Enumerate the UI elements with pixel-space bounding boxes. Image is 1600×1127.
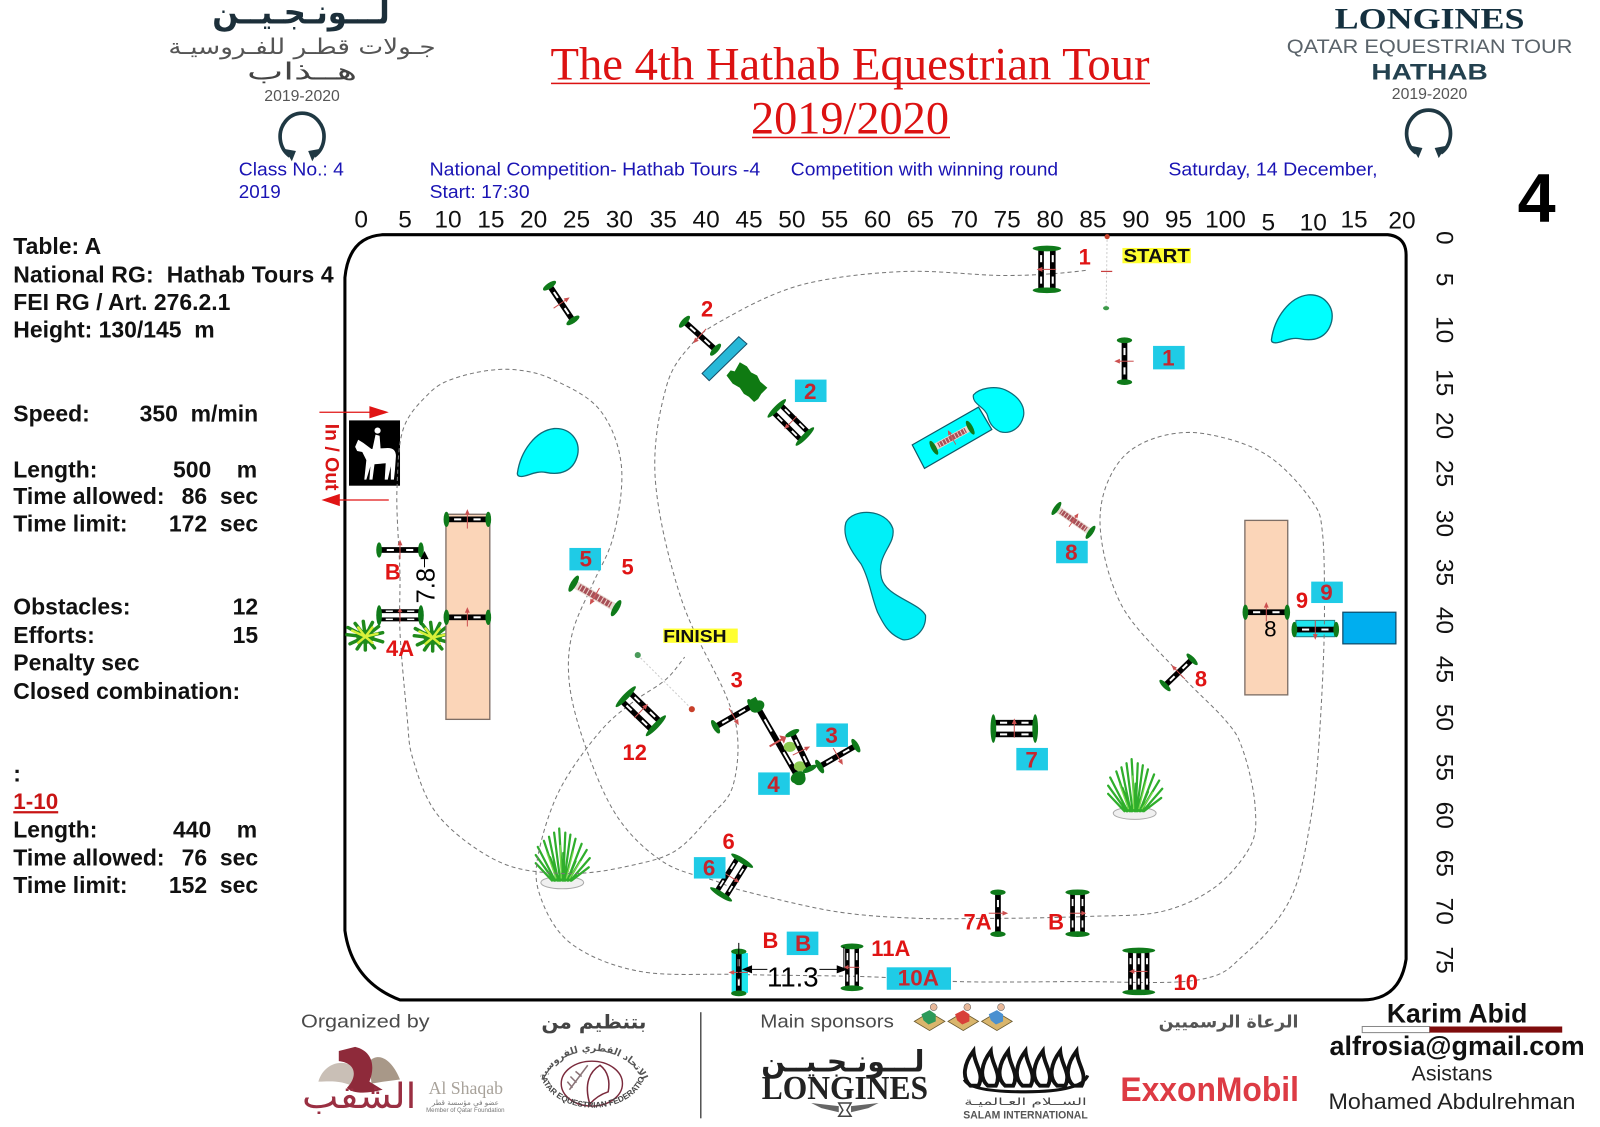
table and rules: Height: 130/145 m — [13, 317, 215, 343]
jump 2 oxer — [766, 397, 816, 447]
top metre axis: 50 — [778, 207, 805, 234]
red jump numbers: 11A — [871, 936, 910, 961]
jump 1 vertical — [1114, 337, 1134, 385]
start label: START — [1123, 245, 1191, 266]
title — [551, 39, 1150, 145]
top metre axis: 0 — [354, 207, 368, 234]
red jump numbers: 6 — [722, 829, 735, 854]
right metre axis: 35 — [1431, 559, 1458, 586]
Qatar Equestrian Federation logo — [540, 1044, 648, 1108]
long rail 4 — [746, 697, 810, 787]
right metre axis: 75 — [1431, 947, 1458, 974]
plant right of 4A — [414, 622, 450, 651]
Al Shaqab wordmark: Al Shaqab — [429, 1078, 503, 1098]
season: 2019-2020 — [264, 88, 340, 105]
obstacles: Penalty sec — [13, 649, 140, 675]
grass lower right — [1108, 759, 1162, 819]
right metre axis: 60 — [1431, 802, 1458, 829]
pond upper centre — [973, 388, 1024, 432]
red jump numbers: 9 — [1296, 588, 1308, 613]
Salam International logo: SALAM INTERNATIONAL — [963, 1109, 1088, 1121]
Longines logo — [761, 1044, 928, 1116]
pond top right — [1271, 295, 1332, 343]
start line — [1101, 234, 1112, 310]
arabic official sponsors: الرعاة الرسميين — [1159, 1013, 1298, 1033]
distance 11.3: 11.3 — [767, 962, 819, 993]
first round times: 172 sec — [169, 511, 258, 537]
Longines logo: LONGINES — [762, 1070, 928, 1107]
right metre axis: 40 — [1431, 607, 1458, 634]
right metre axis: 10 — [1431, 316, 1458, 343]
box 8 — [1056, 540, 1088, 565]
course route — [397, 270, 1324, 983]
obstacles: 15 — [233, 622, 258, 648]
jump 1 — [1033, 246, 1061, 293]
left tour logo (Arabic) — [168, 0, 436, 161]
finish label: FINISH — [663, 626, 727, 646]
plant left of 4A — [347, 621, 383, 650]
red jump numbers: 7A — [964, 910, 992, 935]
jump 3 — [708, 696, 759, 737]
box 4: 4 — [767, 772, 780, 797]
right metre axis: 0 — [1431, 231, 1458, 245]
grass lower left — [536, 829, 590, 889]
box 6 — [694, 855, 726, 880]
season: 2019-2020 — [1392, 86, 1468, 103]
jump 2 — [676, 313, 724, 359]
second round heading: 1-10 — [13, 789, 58, 814]
box 9: 9 — [1320, 580, 1333, 605]
jump 7 — [991, 714, 1038, 743]
red jump numbers: 5 — [621, 554, 634, 579]
top metre axis: 45 — [735, 207, 763, 234]
top metre axis: 15 — [1340, 207, 1368, 234]
jump B right — [1065, 889, 1090, 937]
obstacles: Obstacles: — [13, 593, 131, 619]
footer: organizers — [301, 1011, 648, 1117]
title line 1: The 4th Hathab Equestrian Tour — [551, 39, 1150, 91]
top metre axis: 35 — [650, 207, 677, 234]
right metre axis: 50 — [1431, 704, 1458, 731]
second round times: Time limit: — [13, 872, 128, 898]
sponsor figures icon — [914, 1004, 1012, 1031]
Al Shaqab wordmark: عضو في مؤسسة قطر — [431, 1098, 499, 1107]
right metre axis: 70 — [1431, 898, 1458, 925]
box 5 — [569, 546, 601, 571]
second round times: 440 m — [173, 817, 257, 843]
designer credits — [1329, 998, 1585, 1114]
red jump numbers: 10 — [1174, 970, 1198, 995]
box 6: 6 — [703, 855, 715, 880]
box B: B — [795, 931, 811, 956]
Al Shaqab logo: الشقب — [302, 1077, 416, 1117]
red jump numbers: 3 — [731, 668, 743, 693]
top metre axis: 95 — [1165, 207, 1192, 234]
top metre axis: 80 — [1036, 207, 1064, 234]
box 1: 1 — [1162, 345, 1175, 370]
water tray under jump — [912, 407, 992, 468]
Al Shaqab wordmark — [426, 1078, 505, 1114]
second round times: Time allowed: — [13, 844, 165, 870]
jump 4A — [376, 605, 424, 625]
jump on left sand mid — [444, 607, 491, 627]
jump 11A — [841, 944, 863, 991]
top metre axis: 10 — [434, 207, 462, 234]
table and rules: National RG: Hathab Tours 4 — [13, 262, 334, 288]
jump over water tray — [927, 419, 976, 456]
top metre axis: 5 — [1262, 210, 1275, 237]
red jump numbers: B — [762, 928, 778, 953]
start time: Start: 17:30 — [430, 181, 530, 202]
first round times: 500 m — [173, 457, 257, 483]
arabic venue: هــذاب — [247, 58, 357, 86]
competition type: Competition with winning round — [791, 159, 1058, 180]
jump 3 second — [813, 736, 863, 777]
email: alfrosia@gmail.com — [1330, 1031, 1585, 1061]
jump 5 — [566, 574, 623, 619]
small water tray — [1296, 620, 1335, 637]
top metre axis: 25 — [563, 207, 590, 234]
box 10A — [887, 966, 951, 991]
arabic organized by: بتنظيم من — [541, 1011, 646, 1034]
ExxonMobil logo: ExxonMobil — [1120, 1071, 1299, 1109]
distance 8: 8 — [1264, 617, 1277, 642]
speed: Speed: — [13, 400, 90, 426]
jump 8 pink — [1050, 500, 1098, 540]
box 5: 5 — [579, 546, 592, 571]
pond central — [845, 512, 926, 640]
title underline 2 — [752, 137, 950, 138]
table and rules: Table: A — [13, 233, 101, 259]
second round times: 152 sec — [169, 872, 258, 898]
horse and rider sign — [349, 420, 400, 486]
name bar — [1362, 1026, 1562, 1033]
venue: HATHAB — [1371, 60, 1488, 85]
top metre axis: 60 — [864, 207, 891, 234]
footer divider — [700, 1012, 702, 1118]
jump 12 — [614, 684, 668, 738]
box 3 — [816, 723, 848, 748]
speed — [13, 400, 258, 426]
plants — [347, 621, 1162, 889]
top metre axis: 70 — [951, 207, 978, 234]
jump 6 — [709, 852, 755, 903]
first round times — [13, 457, 258, 537]
box B — [787, 931, 818, 956]
pond left — [517, 429, 578, 477]
brand: LONGINES — [1335, 4, 1524, 36]
top metre axis: 5 — [398, 207, 412, 234]
speed: 350 m/min — [140, 400, 258, 426]
left specification panel — [13, 233, 334, 898]
top metre axis: 10 — [1300, 210, 1327, 237]
jump 9 — [1292, 620, 1339, 640]
arena outline — [345, 235, 1406, 1000]
arabic tour name: جـولات قطـر للفـروسيـة — [168, 35, 436, 60]
exit arrow — [321, 494, 389, 506]
first round times: 86 sec — [182, 483, 258, 509]
jump on left sand top — [444, 509, 491, 529]
jump on right sand — [1243, 602, 1290, 621]
red jump numbers: 4A — [386, 636, 414, 661]
Longines logo: لـــونـجـيــن — [761, 1044, 924, 1078]
blue plank — [702, 337, 747, 381]
distance 7.8: 7.8 — [413, 568, 441, 603]
second round times: Length: — [13, 817, 97, 843]
top metre axis: 55 — [821, 207, 848, 234]
table and rules — [13, 233, 334, 343]
designer name: Karim Abid — [1387, 998, 1527, 1028]
first round times: Length: — [13, 457, 97, 483]
red jump numbers: 1 — [1079, 244, 1091, 269]
right metre axis: 30 — [1431, 510, 1458, 537]
class number: 4 — [1518, 160, 1556, 236]
box 2 — [795, 379, 827, 404]
box 9 — [1311, 580, 1343, 605]
box 8: 8 — [1065, 540, 1078, 565]
box 4 — [758, 772, 790, 797]
top metre axis: 85 — [1079, 207, 1106, 234]
right metre axis: 25 — [1431, 460, 1458, 487]
box 10A: 10A — [898, 966, 939, 991]
Qatar Equestrian Federation logo: الاتحاد القطري للفروسية — [540, 1044, 648, 1080]
second round times: 76 sec — [182, 844, 258, 870]
distance 7.8 — [413, 551, 441, 603]
water ponds — [517, 295, 1396, 644]
finish line — [635, 652, 695, 712]
first round times: Time allowed: — [13, 483, 165, 509]
competition info — [239, 159, 1378, 202]
entry arrow — [319, 406, 389, 418]
assistant name: Mohamed Abdulrehman — [1329, 1089, 1575, 1114]
assistant heading: Asistans — [1412, 1062, 1492, 1086]
distance 11.3 — [739, 943, 848, 993]
jump 10 — [1122, 948, 1155, 995]
first round times: Time limit: — [13, 511, 128, 537]
top metre axis: 65 — [907, 207, 934, 234]
sand box right — [1245, 520, 1288, 695]
box 2: 2 — [804, 379, 816, 404]
obstacles: 12 — [233, 593, 258, 619]
blue rectangle — [1343, 612, 1396, 644]
red jump numbers: 12 — [623, 740, 647, 765]
date: Saturday, 14 December, — [1168, 159, 1378, 180]
red jump numbers: B — [385, 560, 401, 585]
red jump numbers: 2 — [701, 296, 713, 321]
second round heading: : — [13, 761, 21, 787]
right metre axis: 5 — [1431, 273, 1458, 286]
in/out label: In / Out — [321, 424, 343, 491]
red jump numbers: B — [1048, 910, 1064, 935]
ring symbol — [280, 113, 324, 161]
title underline 1 — [551, 83, 1150, 84]
Al Shaqab wordmark: Member of Qatar Foundation — [426, 1107, 505, 1114]
top metre axis: 40 — [693, 207, 720, 234]
top metre axis: 20 — [520, 207, 547, 234]
Al Shaqab logo — [302, 1047, 416, 1117]
right metre axis: 45 — [1431, 656, 1458, 683]
class number line: Class No.: 4 — [239, 159, 344, 180]
jump top left — [540, 278, 583, 328]
title line 2: 2019/2020 — [751, 93, 949, 145]
jump 8 — [1156, 650, 1200, 694]
top metre axis: 30 — [606, 207, 633, 234]
table and rules: FEI RG / Art. 276.2.1 — [13, 289, 231, 315]
right metre axis: 55 — [1431, 754, 1458, 781]
inner rail with shrubs — [783, 726, 820, 775]
red jump numbers: 8 — [1195, 667, 1207, 692]
Qatar Equestrian Federation logo: QATAR EQUESTRIAN FEDERATION — [541, 1076, 644, 1108]
green hedge — [727, 362, 767, 402]
box 7 — [1016, 747, 1048, 772]
footer: sponsors — [760, 1004, 1299, 1121]
obstacles — [13, 593, 258, 704]
obstacles: Closed combination: — [13, 678, 240, 704]
sand box left — [446, 514, 490, 719]
organized by label: Organized by — [301, 1011, 430, 1032]
competition name: National Competition- Hathab Tours -4 — [430, 159, 760, 180]
jump 7A — [989, 889, 1008, 937]
box 7: 7 — [1025, 747, 1038, 772]
main sponsors label: Main sponsors — [760, 1011, 894, 1032]
right metre axis: 65 — [1431, 850, 1458, 877]
box 3: 3 — [825, 723, 838, 748]
top metre axis: 20 — [1388, 208, 1416, 235]
second round times — [13, 817, 258, 898]
top metre axis: 100 — [1205, 207, 1246, 234]
obstacles: Efforts: — [13, 622, 95, 648]
top metre axis — [354, 207, 1416, 237]
red jump numbers — [385, 244, 1308, 995]
sand boxes — [446, 514, 1288, 719]
second round heading — [13, 761, 58, 814]
right metre axis — [1431, 231, 1458, 974]
tour name: QATAR EQUESTRIAN TOUR — [1287, 36, 1572, 58]
top metre axis: 90 — [1122, 207, 1149, 234]
jump B water — [729, 949, 748, 996]
cyan boxes with numbers — [569, 345, 1343, 991]
top metre axis: 75 — [994, 207, 1021, 234]
right metre axis: 20 — [1431, 412, 1458, 439]
top metre axis: 15 — [477, 207, 504, 234]
box 1 — [1153, 345, 1185, 370]
ring symbol — [1407, 110, 1450, 158]
right metre axis: 15 — [1431, 369, 1458, 396]
year: 2019 — [239, 181, 281, 202]
Salam International logo: الســلام العـالميـة — [964, 1097, 1087, 1108]
right tour logo — [1287, 4, 1572, 158]
Salam International logo — [963, 1051, 1088, 1121]
in/out gate — [319, 406, 400, 506]
jump B left — [376, 540, 424, 559]
